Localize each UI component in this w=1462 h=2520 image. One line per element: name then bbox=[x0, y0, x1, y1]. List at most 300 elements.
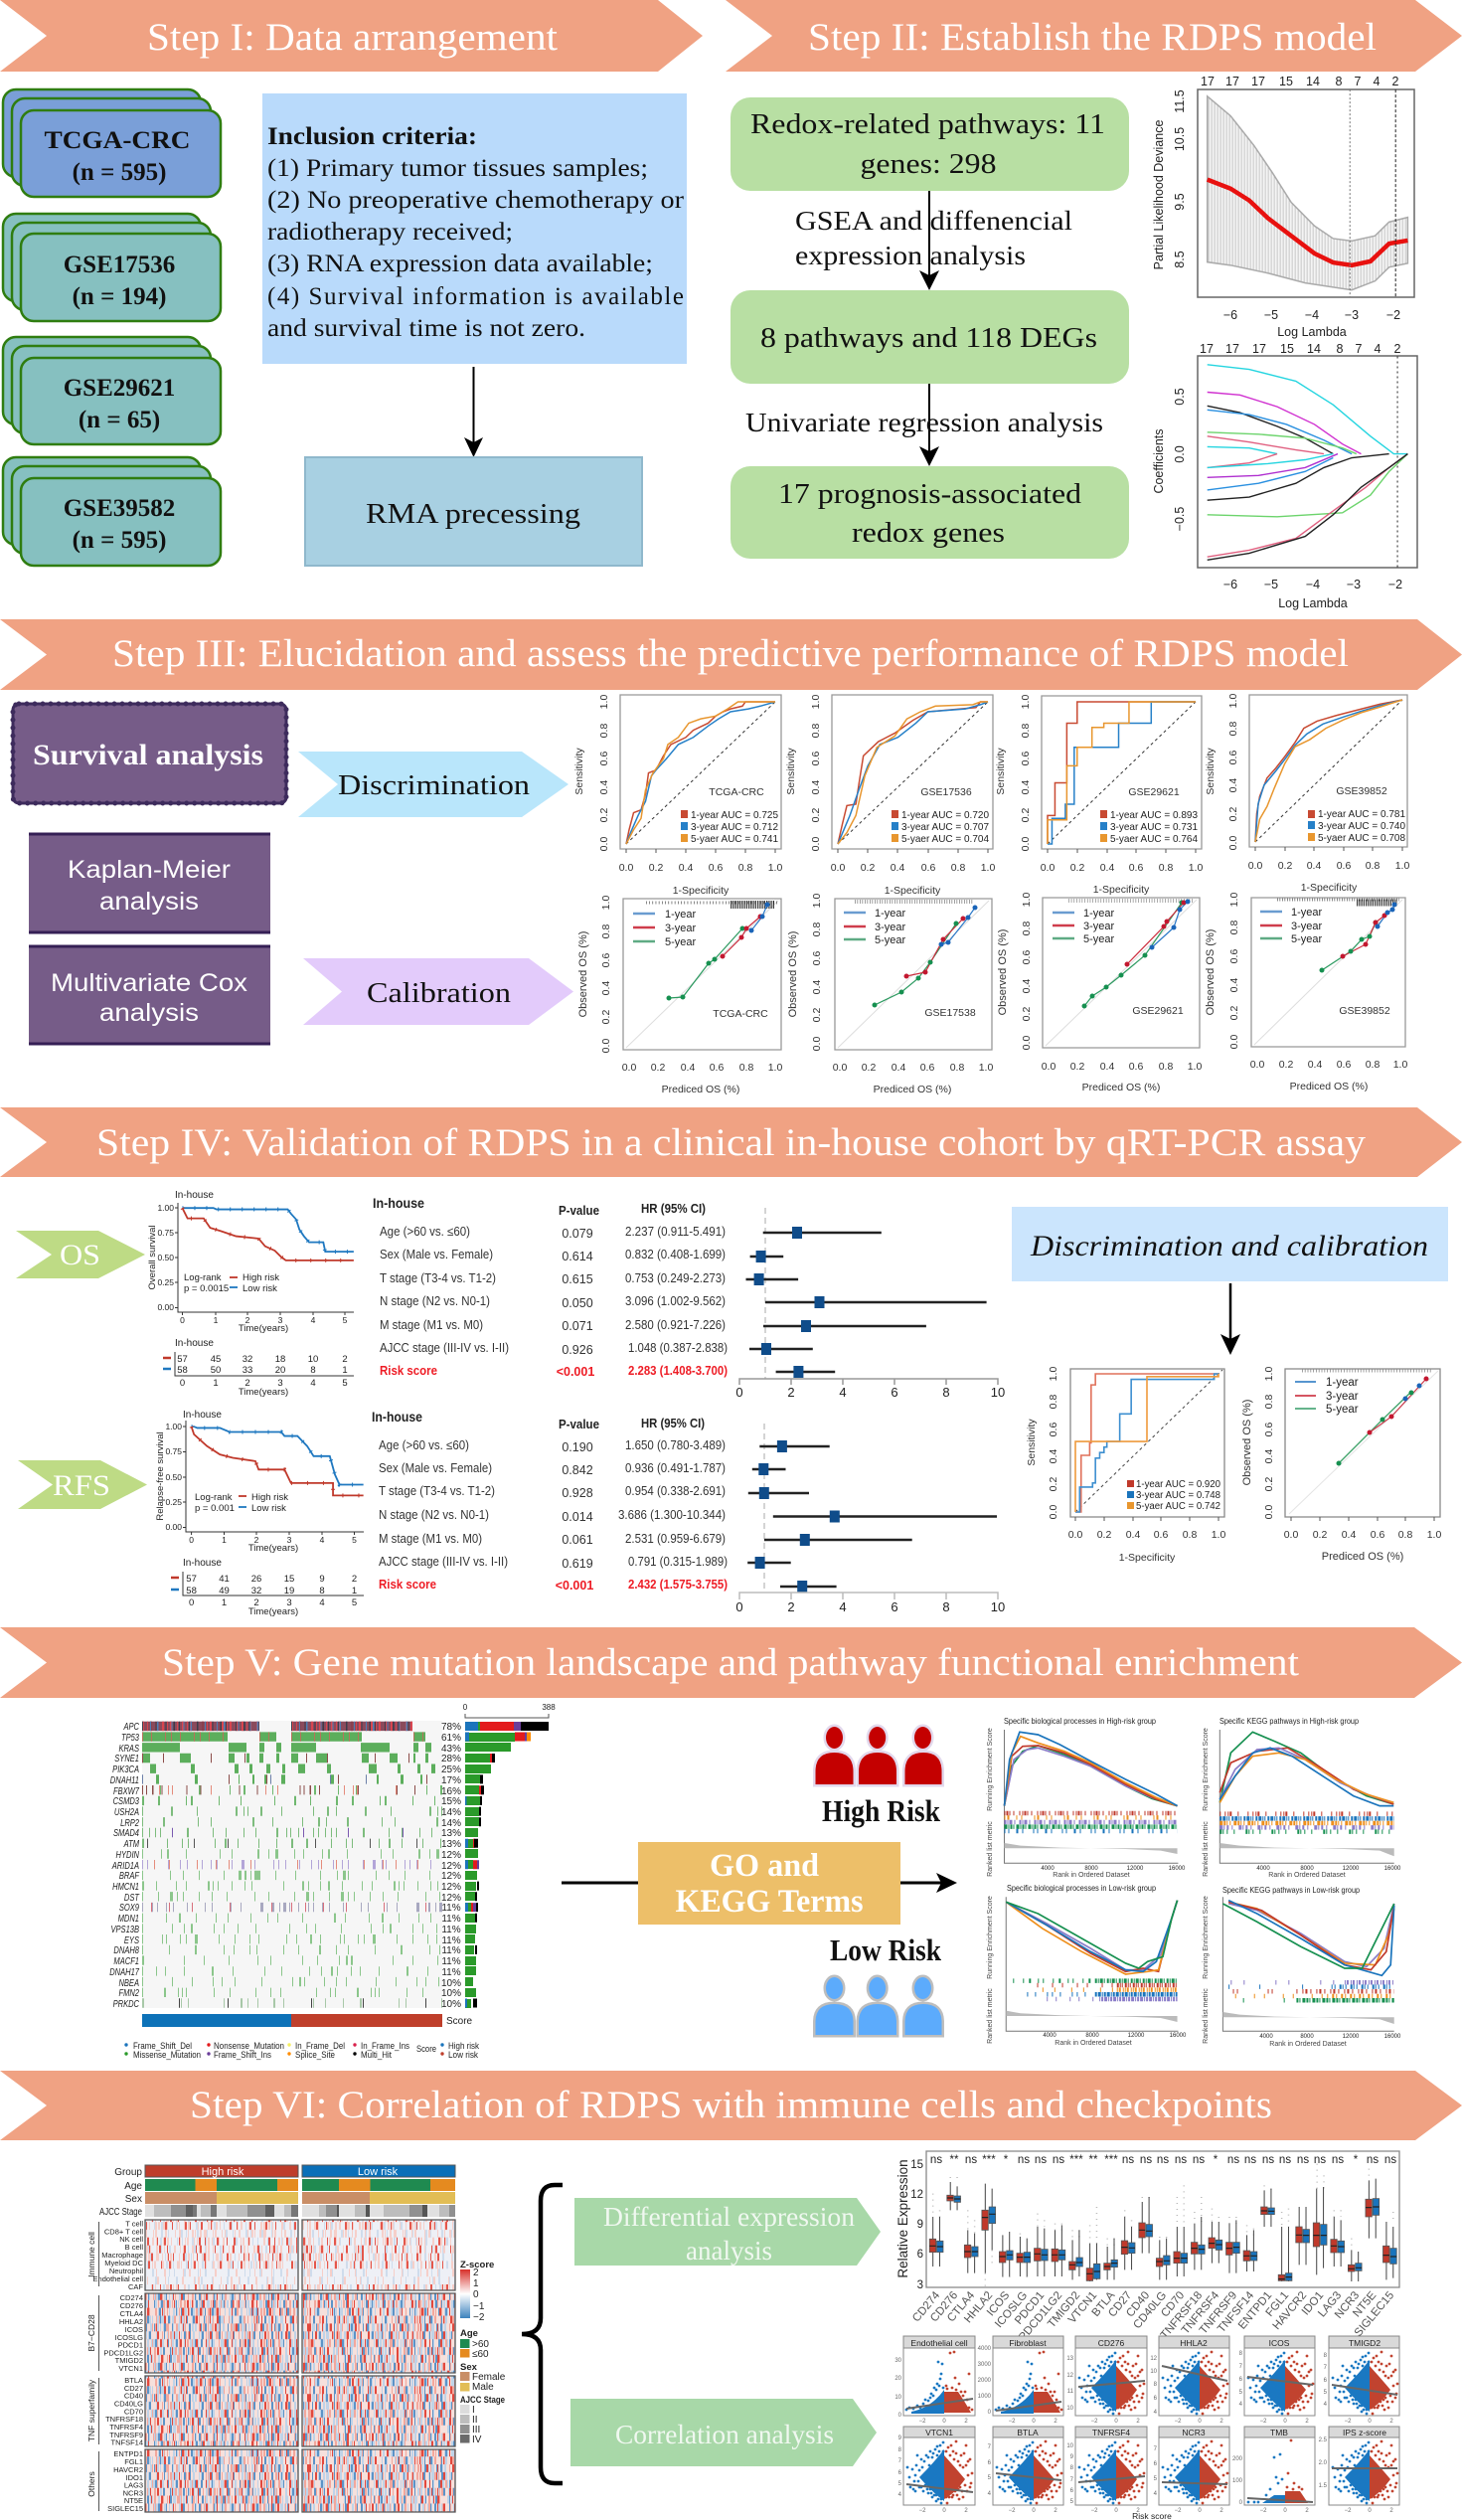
chart: KM overall survival: 0.00 bbox=[157, 1302, 174, 1312]
heatmap block: B7-CD28: PDCD1 bbox=[118, 2340, 143, 2350]
table: RFS numbers at risk: 4 bbox=[319, 1597, 325, 1608]
scatter: TMIGD2 bbox=[1324, 2336, 1399, 2425]
oncoplot gene labels: DNAH8 bbox=[113, 1944, 140, 1955]
box plot significance labels: ns bbox=[930, 2154, 942, 2166]
scatter: ICOS: 2 bbox=[1305, 2419, 1309, 2425]
scatter: IPS z-score bbox=[1319, 2427, 1399, 2514]
chart: ROC GSE29621: 0.6 bbox=[1020, 752, 1032, 765]
box plot axes: NCR3 bbox=[1333, 2289, 1362, 2321]
chart: KM relapse-free survival: 0 bbox=[189, 1535, 194, 1545]
chart: calibration GSE29621: 0.6 bbox=[1021, 950, 1033, 964]
table: RFS numbers at risk: 41 bbox=[219, 1574, 230, 1585]
scatter: TMIGD2: TMIGD2 bbox=[1349, 2338, 1381, 2348]
scatter: TNFRSF4: 10 bbox=[1066, 2443, 1074, 2449]
chart: KM overall survival: 1.00 bbox=[157, 1203, 174, 1213]
chart: LASSO deviance: −3 bbox=[1345, 308, 1359, 322]
oncoplot legend: In_Frame_Ins bbox=[361, 2041, 409, 2051]
chart: KM overall survival: Overall survival bbox=[147, 1226, 158, 1289]
heatmap legend: 0 bbox=[473, 2289, 479, 2300]
heatmap block: TNF superfamily: TNF superfamily bbox=[86, 2379, 96, 2441]
scatter: BTLA: 6 bbox=[988, 2460, 992, 2466]
chart: in-house ROC: 5-yaer AUC = 0.742 bbox=[1136, 1501, 1220, 1512]
chart: calibration GSE17538: 1.0 bbox=[979, 1062, 993, 1074]
scatter: CD276: 0 bbox=[1114, 2419, 1118, 2425]
chart: RFS forest plot: 6 bbox=[891, 1599, 898, 1614]
box plot significance labels: ns bbox=[1053, 2154, 1064, 2166]
chart: in-house ROC: 0.4 bbox=[1048, 1449, 1059, 1463]
label: univariate analysis: Univariate regression analysis bbox=[745, 408, 1103, 437]
chart: ROC GSE39852: 0.4 bbox=[1227, 778, 1239, 792]
chart: calibration TCGA-CRC: 5-year bbox=[665, 936, 697, 948]
chart: KM overall survival bbox=[147, 1190, 354, 1334]
scatter: Fibroblast: 2000 bbox=[978, 2378, 992, 2384]
oncoplot legend: Multi_Hit bbox=[361, 2050, 392, 2060]
oncoplot gene labels: MDN1 bbox=[118, 1913, 139, 1924]
oncoplot percentages: 12% bbox=[441, 1871, 461, 1882]
chart: ROC TCGA-CRC: 0.2 bbox=[598, 808, 610, 822]
scatter: Endothelial cell: −2 bbox=[919, 2419, 926, 2425]
table: RFS numbers at risk: Time(years) bbox=[248, 1606, 298, 1617]
oncoplot gene labels: HMCN1 bbox=[112, 1881, 139, 1892]
chart: ROC GSE17536: Sensitivity bbox=[785, 748, 797, 795]
box: DEGs bbox=[731, 290, 1129, 384]
heatmap legend: IV bbox=[472, 2435, 482, 2445]
chart: GSEA biological processes low-risk: Rank in Ordered Dataset bbox=[1055, 2040, 1132, 2047]
chart: LASSO coefficients: −3 bbox=[1347, 578, 1361, 591]
oncoplot gene labels: ARID1A bbox=[111, 1860, 139, 1871]
box plot significance labels: ** bbox=[950, 2154, 959, 2166]
box plot axes: PDCD1LG2 bbox=[1017, 2289, 1064, 2343]
chart: ROC GSE39852: 1-Specificity bbox=[1301, 882, 1358, 894]
table: RFS numbers at risk: 26 bbox=[251, 1574, 261, 1585]
box: prognosis genes: 17 prognosis-associated bbox=[778, 479, 1081, 510]
oncoplot legend: In_Frame_Del bbox=[295, 2041, 345, 2051]
box: RMA processing: RMA precessing bbox=[366, 499, 580, 530]
chart: in-house ROC: 1.0 bbox=[1212, 1529, 1225, 1541]
chart: ROC GSE17536: 3-year AUC = 0.707 bbox=[901, 821, 989, 833]
scatter: TNFRSF4: 0 bbox=[1114, 2508, 1118, 2514]
chart: LASSO coefficients bbox=[1152, 342, 1417, 610]
table: RFS numbers at risk: 58 bbox=[186, 1586, 197, 1596]
scatter: BTLA: 5 bbox=[988, 2475, 992, 2481]
chart: ROC TCGA-CRC: 1.0 bbox=[598, 695, 610, 709]
box plot axes: 12 bbox=[910, 2189, 923, 2201]
chart: calibration GSE39852: 0.2 bbox=[1228, 1006, 1240, 1020]
heatmap block: immune cell: NK cell bbox=[119, 2235, 143, 2244]
chart: LASSO coefficients: 17 bbox=[1200, 342, 1214, 356]
banner: Step I: Step I: Data arrangement bbox=[147, 16, 558, 59]
box plot axes: 6 bbox=[917, 2249, 923, 2261]
dataset: GSE29621 bbox=[3, 337, 221, 444]
scatter: TNFRSF4: 2 bbox=[1136, 2508, 1140, 2514]
chart: ROC GSE29621: 0.8 bbox=[1020, 724, 1032, 738]
chart: LASSO deviance: 11.5 bbox=[1173, 89, 1187, 113]
oncoplot gene labels: KRAS bbox=[118, 1743, 139, 1754]
chart: calibration GSE29621: 0.4 bbox=[1021, 979, 1033, 993]
oncoplot gene labels: USH2A bbox=[114, 1806, 139, 1817]
box plot significance labels: ns bbox=[1262, 2154, 1274, 2166]
chart: LASSO coefficients: 2 bbox=[1394, 342, 1401, 356]
heatmap annotation tracks: AJCC Stage bbox=[99, 2207, 142, 2218]
chart: RFS forest plot: 3.686 (1.300-10.344) bbox=[618, 1508, 726, 1522]
oncoplot gene labels: NBEA bbox=[118, 1977, 139, 1988]
scatter: Endothelial cell: 30 bbox=[894, 2358, 902, 2364]
chart: GSEA KEGG high-risk: 12000 bbox=[1343, 1866, 1360, 1872]
scatter: IPS z-score: −2 bbox=[1345, 2508, 1352, 2514]
oncoplot percentages: 10% bbox=[441, 1988, 461, 1999]
heatmap block: immune cell: Macrophage bbox=[101, 2251, 143, 2260]
scatter: NCR3: −2 bbox=[1175, 2508, 1182, 2514]
heatmap block: immune cell: B cell bbox=[125, 2243, 143, 2252]
chart: RFS forest plot: N stage (N2 vs. N0-1) bbox=[379, 1508, 489, 1522]
chart: calibration GSE39852: 0.4 bbox=[1228, 978, 1240, 992]
box plot axes: BTLA bbox=[1090, 2289, 1118, 2319]
oncoplot gene labels: APC bbox=[123, 1721, 139, 1732]
chart: ROC GSE17536: 0.8 bbox=[951, 862, 965, 874]
scatter: Fibroblast: Fibroblast bbox=[1009, 2338, 1047, 2348]
panel: inclusion criteria: and survival time is not zero. bbox=[267, 315, 585, 342]
dataset: GSE17536: GSE17536 bbox=[64, 252, 175, 278]
banner: Step V bbox=[0, 1627, 1462, 1698]
oncoplot percentages: 43% bbox=[441, 1744, 461, 1755]
chart: calibration TCGA-CRC bbox=[577, 896, 782, 1095]
box plot axes: LAG3 bbox=[1316, 2289, 1344, 2319]
chart: KM overall survival: 0.25 bbox=[157, 1277, 174, 1287]
heatmap block: TNF superfamily: TNFSF14 bbox=[110, 2437, 143, 2447]
chart: ROC TCGA-CRC: 0.2 bbox=[649, 862, 663, 874]
chart: calibration GSE29621: 3-year bbox=[1083, 921, 1115, 932]
scatter: HHLA2: 4 bbox=[1154, 2410, 1158, 2416]
scatter: TMB: 200 bbox=[1232, 2456, 1243, 2462]
chart: LASSO coefficients: 7 bbox=[1356, 342, 1363, 356]
chart: calibration TCGA-CRC: 0.6 bbox=[600, 953, 612, 967]
chart: ROC GSE17536: 0.0 bbox=[831, 862, 845, 874]
chart: KM overall survival: 3 bbox=[278, 1315, 283, 1325]
chart: ROC TCGA-CRC bbox=[573, 695, 782, 897]
chevron: calibration bbox=[303, 958, 573, 1025]
chart: GSEA biological processes low-risk: Ranked list metric bbox=[987, 1988, 994, 2044]
panel: inclusion criteria: radiotherapy received; bbox=[267, 219, 513, 246]
table: OS numbers at risk: 1 bbox=[213, 1378, 219, 1389]
chart: calibration TCGA-CRC: 0.8 bbox=[600, 924, 612, 938]
chart: OS forest plot: 4 bbox=[839, 1385, 847, 1400]
box: Kaplan-Meier: analysis bbox=[99, 888, 199, 916]
table: RFS numbers at risk: 2 bbox=[253, 1597, 259, 1608]
chart: LASSO coefficients: 8 bbox=[1337, 342, 1344, 356]
box plot axes: HAVCR2 bbox=[1271, 2289, 1309, 2332]
chart: RFS forest plot: 0.791 (0.315-1.989) bbox=[628, 1555, 728, 1569]
heatmap legend: II bbox=[472, 2415, 478, 2426]
chart: calibration GSE39852: 0.4 bbox=[1308, 1059, 1322, 1071]
chart: in-house calibration: 0.8 bbox=[1263, 1395, 1275, 1409]
scatter: TMIGD2: −2 bbox=[1345, 2419, 1352, 2425]
oncoplot legend: Missense_Mutation bbox=[133, 2050, 201, 2060]
chart: calibration GSE17538: 1.0 bbox=[811, 894, 823, 908]
chart: calibration GSE17538: 0.2 bbox=[811, 1008, 823, 1022]
chart: calibration GSE39852: 0.6 bbox=[1228, 949, 1240, 963]
chart: KM relapse-free survival: 0.50 bbox=[165, 1472, 182, 1482]
chart: calibration GSE39852: 5-year bbox=[1291, 933, 1323, 945]
chart: RFS forest plot: 10 bbox=[991, 1599, 1005, 1614]
heatmap block: immune cell: CAF bbox=[128, 2282, 143, 2291]
chart: GSEA KEGG low-risk: Ranked list metric bbox=[1203, 1988, 1210, 2044]
heatmap legend: ≤60 bbox=[472, 2349, 489, 2360]
chart: calibration GSE29621: 0.0 bbox=[1042, 1061, 1056, 1073]
scatter: TNFRSF4: 9 bbox=[1070, 2454, 1074, 2460]
scatter: TMB: TMB bbox=[1270, 2428, 1288, 2437]
box: GO and KEGG terms: GO and bbox=[710, 1848, 819, 1884]
heatmap block: TNF superfamily: CD70 bbox=[124, 2408, 143, 2416]
chart: GSEA biological processes low-risk: Specific biological processes in Low-risk group bbox=[1007, 1883, 1156, 1893]
oncoplot legend: Splice_Site bbox=[295, 2050, 335, 2060]
oncoplot percentages: 28% bbox=[441, 1754, 461, 1764]
chart: GSEA biological processes high-risk: 12000 bbox=[1127, 1866, 1144, 1872]
arrow: GO box to GSEA bbox=[900, 1873, 957, 1893]
scatter: HHLA2: HHLA2 bbox=[1180, 2338, 1208, 2348]
chart: ROC GSE29621: GSE29621 bbox=[1128, 786, 1180, 798]
chart: ROC GSE29621: 1-year AUC = 0.893 bbox=[1110, 809, 1198, 821]
scatter: IPS z-score: 1.5 bbox=[1319, 2483, 1328, 2489]
scatter: Fibroblast: 0 bbox=[988, 2410, 992, 2416]
arrow: into GO box bbox=[562, 1881, 638, 1885]
table: RFS numbers at risk: 5 bbox=[352, 1597, 357, 1608]
scatter: VTCN1: 7 bbox=[898, 2458, 902, 2464]
chart: OS forest plot: 2 bbox=[787, 1385, 795, 1400]
chart: KM relapse-free survival: Log-rank bbox=[195, 1492, 233, 1503]
dataset: TCGA-CRC: TCGA-CRC bbox=[44, 127, 190, 154]
chart: KM relapse-free survival bbox=[155, 1410, 364, 1554]
chart: ROC GSE29621: 0.6 bbox=[1129, 862, 1143, 874]
chart: in-house calibration: 0.8 bbox=[1398, 1529, 1412, 1541]
heatmap block: TNF superfamily: TNFRSF18 bbox=[105, 2415, 143, 2424]
scatter: HHLA2: −2 bbox=[1175, 2419, 1182, 2425]
oncoplot percentages: 11% bbox=[441, 1967, 461, 1978]
oncoplot legend bbox=[124, 2041, 479, 2060]
chart: ROC TCGA-CRC: 0.6 bbox=[709, 862, 723, 874]
scatter: IPS z-score: 2.0 bbox=[1319, 2460, 1328, 2466]
chart: ROC GSE39852: 3-year AUC = 0.740 bbox=[1318, 820, 1405, 832]
chart: GSEA biological processes high-risk: 8000 bbox=[1084, 1866, 1098, 1872]
scatter: ICOS: −2 bbox=[1260, 2419, 1267, 2425]
dataset: GSE39582: (n = 595) bbox=[73, 527, 166, 554]
chart: LASSO deviance: 10.5 bbox=[1173, 127, 1187, 151]
box plot significance labels: ns bbox=[1244, 2154, 1256, 2166]
heatmap block: B7-CD28: TMIGD2 bbox=[115, 2356, 143, 2365]
box plot significance labels: *** bbox=[1069, 2154, 1083, 2166]
chart: ROC GSE17536: 0.4 bbox=[810, 780, 822, 794]
oncoplot percentages: 13% bbox=[441, 1828, 461, 1839]
oncoplot gene labels: PIK3CA bbox=[112, 1764, 139, 1774]
chart: RFS forest plot: AJCC stage (III-IV vs. I-II) bbox=[379, 1555, 508, 1569]
heatmap annotation tracks: Group bbox=[114, 2167, 142, 2178]
oncoplot percentages: 12% bbox=[441, 1850, 461, 1861]
chart: LASSO deviance: 7 bbox=[1355, 75, 1362, 88]
scatter: BTLA: 0 bbox=[1032, 2508, 1036, 2514]
oncoplot percentages: 10% bbox=[441, 1978, 461, 1989]
oncoplot gene labels: DNAH17 bbox=[109, 1966, 140, 1977]
chart: RFS forest plot: 2.432 (1.575-3.755) bbox=[628, 1578, 728, 1592]
scatter: TMB: 2 bbox=[1305, 2508, 1309, 2514]
chart: KM relapse-free survival: In-house bbox=[183, 1410, 222, 1421]
box plot axes: CD274 bbox=[910, 2289, 943, 2324]
heatmap block: others: Others bbox=[86, 2471, 96, 2497]
chart: calibration GSE39852: Observed OS (%) bbox=[1205, 929, 1217, 1015]
chart: OS forest plot: 0.832 (0.408-1.699) bbox=[625, 1248, 726, 1261]
chart: KM overall survival: 0.75 bbox=[157, 1228, 174, 1238]
chart: OS forest plot: 2.237 (0.911-5.491) bbox=[625, 1225, 726, 1239]
chart: calibration GSE29621: 5-year bbox=[1083, 933, 1115, 945]
table: OS numbers at risk: 2 bbox=[244, 1378, 250, 1389]
heatmap block: immune cell: Endothelial cell bbox=[93, 2274, 143, 2283]
chart: OS forest plot: N stage (N2 vs. N0-1) bbox=[380, 1294, 490, 1308]
chart: RFS forest plot: 1.650 (0.780-3.489) bbox=[625, 1438, 726, 1452]
table: OS numbers at risk: 20 bbox=[275, 1365, 285, 1376]
chart: KM overall survival: Low risk bbox=[243, 1283, 277, 1294]
chart: ROC GSE17536: 5-yaer AUC = 0.704 bbox=[901, 833, 989, 845]
chart: ROC TCGA-CRC: 0.4 bbox=[679, 862, 693, 874]
chart: OS forest plot: 0.615 bbox=[562, 1272, 593, 1286]
scatter: CD276 bbox=[1066, 2336, 1147, 2425]
heatmap block: others: HAVCR2 bbox=[113, 2465, 143, 2474]
heatmap annotation tracks: Age bbox=[124, 2181, 142, 2192]
box plot significance labels: ns bbox=[1157, 2154, 1169, 2166]
chart: in-house calibration: 0.0 bbox=[1263, 1505, 1275, 1519]
oncoplot gene labels: FMN2 bbox=[118, 1987, 139, 1998]
oncoplot percentages: 12% bbox=[441, 1882, 461, 1893]
table: OS numbers at risk: 32 bbox=[243, 1354, 252, 1365]
chart: in-house ROC: 3-year AUC = 0.748 bbox=[1136, 1490, 1220, 1501]
scatter: VTCN1: 6 bbox=[898, 2470, 902, 2476]
heatmap block: immune cell: Immune cell bbox=[86, 2232, 96, 2277]
table: OS numbers at risk: 45 bbox=[211, 1354, 221, 1365]
chart: GSEA KEGG high-risk: 4000 bbox=[1256, 1866, 1270, 1872]
chart: ROC GSE29621: 0.0 bbox=[1041, 862, 1055, 874]
oncoplot percentages: 78% bbox=[441, 1722, 461, 1733]
chart: ROC GSE39852: 0.0 bbox=[1248, 860, 1262, 872]
scatter: CD276: −2 bbox=[1091, 2419, 1098, 2425]
chart: LASSO deviance: 8.5 bbox=[1173, 251, 1187, 268]
table: OS numbers at risk: 3 bbox=[277, 1378, 283, 1389]
chart: KM overall survival: High risk bbox=[243, 1272, 279, 1283]
chart: GSEA biological processes low-risk: 12000 bbox=[1128, 2033, 1145, 2039]
chart: calibration TCGA-CRC: 1.0 bbox=[600, 896, 612, 910]
chart: LASSO deviance: 17 bbox=[1225, 75, 1239, 88]
heatmap block: B7-CD28 bbox=[86, 2293, 455, 2373]
chart: ROC GSE39852: 0.0 bbox=[1227, 836, 1239, 850]
oncoplot percentages: 15% bbox=[441, 1796, 461, 1807]
box plot axes bbox=[895, 2159, 1396, 2343]
box plot axes: 9 bbox=[917, 2219, 923, 2231]
chart: in-house calibration: Prediced OS (%) bbox=[1322, 1551, 1403, 1563]
chart: checkpoint box plot bbox=[895, 2151, 1399, 2343]
chart: KM overall survival: 1 bbox=[214, 1315, 219, 1325]
box plot significance labels: * bbox=[1004, 2154, 1009, 2166]
chart: ROC GSE17536: 0.2 bbox=[861, 862, 875, 874]
box plot significance labels bbox=[930, 2154, 1396, 2166]
table: RFS numbers at risk: 19 bbox=[284, 1586, 294, 1596]
chart: calibration GSE29621 bbox=[997, 893, 1202, 1093]
chart: GSEA biological processes high-risk: Rank in Ordered Dataset bbox=[1053, 1872, 1130, 1879]
scatter: VTCN1: VTCN1 bbox=[925, 2428, 953, 2437]
chart: in-house ROC: 0.2 bbox=[1097, 1529, 1111, 1541]
label: GSEA analysis: GSEA and diffenencial bbox=[795, 206, 1072, 236]
scatter: BTLA: 4 bbox=[988, 2491, 992, 2497]
box plot significance labels: ns bbox=[1175, 2154, 1187, 2166]
chart: ROC GSE29621: 0.2 bbox=[1070, 862, 1084, 874]
chart: ROC GSE29621: 3-year AUC = 0.731 bbox=[1110, 821, 1198, 833]
heatmap annotation tracks: Low risk bbox=[358, 2166, 399, 2178]
chart: RFS forest plot: 0.842 bbox=[562, 1463, 593, 1477]
oncoplot score bar bbox=[142, 2014, 473, 2027]
panel: inclusion criteria: Inclusion criteria: bbox=[267, 123, 477, 150]
box plot significance labels: ns bbox=[1367, 2154, 1379, 2166]
heatmap block: B7-CD28: CD274 bbox=[120, 2293, 143, 2302]
chart: ROC GSE17536: 0.4 bbox=[891, 862, 904, 874]
scatter: Endothelial cell bbox=[894, 2336, 975, 2425]
banner: Step IV bbox=[0, 1107, 1462, 1177]
chart: ROC GSE39852: 1.0 bbox=[1227, 694, 1239, 708]
box plot axes: PDCD1 bbox=[1013, 2289, 1047, 2327]
box plot significance labels: ** bbox=[1089, 2154, 1098, 2166]
scatter: ICOS: 0 bbox=[1283, 2419, 1287, 2425]
chart: calibration GSE17538: 0.8 bbox=[811, 923, 823, 936]
chart: LASSO deviance: 17 bbox=[1251, 75, 1265, 88]
chart: in-house ROC: 0.6 bbox=[1048, 1423, 1059, 1436]
box: Kaplan-Meier bbox=[29, 833, 270, 933]
scatter: HHLA2: 10 bbox=[1150, 2369, 1158, 2375]
oncoplot mutation bars: 388 bbox=[542, 1703, 556, 1712]
scatter: NCR3: 7 bbox=[1154, 2446, 1158, 2452]
chart: RFS forest plot: 2.531 (0.959-6.679) bbox=[625, 1532, 726, 1546]
box plot significance labels: *** bbox=[982, 2154, 996, 2166]
chart: in-house ROC bbox=[1026, 1367, 1225, 1564]
heatmap legend: Z-score bbox=[460, 2260, 494, 2270]
heatmap block: immune cell: T cell bbox=[125, 2219, 143, 2229]
box plot significance labels: * bbox=[1214, 2154, 1218, 2166]
chart: in-house calibration: 0.6 bbox=[1371, 1529, 1384, 1541]
oncoplot gene labels: FBXW7 bbox=[113, 1785, 140, 1796]
heatmap legend: Sex bbox=[460, 2362, 478, 2373]
oncoplot legend: High risk bbox=[448, 2041, 479, 2051]
chart: in-house ROC: 1-Specificity bbox=[1119, 1552, 1176, 1564]
chevron: correlation analysis: Correlation analysis bbox=[615, 2420, 834, 2449]
heatmap annotation tracks: High risk bbox=[202, 2166, 244, 2178]
chart: GSEA biological processes high-risk: Running Enrichment Score bbox=[987, 1728, 994, 1811]
arrow: to in-house curves bbox=[1220, 1283, 1240, 1355]
chart: RFS forest plot: 0.014 bbox=[562, 1510, 593, 1524]
oncoplot gene labels: DNAH11 bbox=[110, 1774, 139, 1785]
panel: inclusion criteria bbox=[262, 93, 687, 364]
scatter: CD276: 10 bbox=[1066, 2406, 1074, 2412]
chart: OS forest plot: T stage (T3-4 vs. T1-2) bbox=[380, 1271, 496, 1285]
table: OS numbers at risk: 50 bbox=[211, 1365, 221, 1376]
chart: ROC GSE29621: 0.4 bbox=[1020, 780, 1032, 794]
chart: calibration GSE39852: 0.8 bbox=[1366, 1059, 1380, 1071]
chart: ROC GSE29621: 0.2 bbox=[1020, 808, 1032, 822]
scatter: TMB: 100 bbox=[1232, 2478, 1243, 2484]
box plot axes: HHLA2 bbox=[962, 2289, 995, 2325]
scatter: IPS z-score: IPS z-score bbox=[1343, 2428, 1386, 2437]
chart: calibration GSE39852: 0.2 bbox=[1279, 1059, 1293, 1071]
box plot axes: CD40 bbox=[1124, 2289, 1152, 2319]
chart: RFS forest plot: T stage (T3-4 vs. T1-2) bbox=[379, 1484, 495, 1498]
banner: Step VI bbox=[0, 2071, 1462, 2140]
chart: OS forest plot: AJCC stage (III-IV vs. I-II) bbox=[380, 1341, 509, 1355]
chevron: discrimination: Discrimination bbox=[338, 769, 531, 801]
chart: OS forest plot: 3.096 (1.002-9.562) bbox=[625, 1294, 726, 1308]
chart: KM relapse-free survival: 1.00 bbox=[165, 1422, 182, 1431]
heatmap block: immune cell bbox=[86, 2219, 455, 2291]
